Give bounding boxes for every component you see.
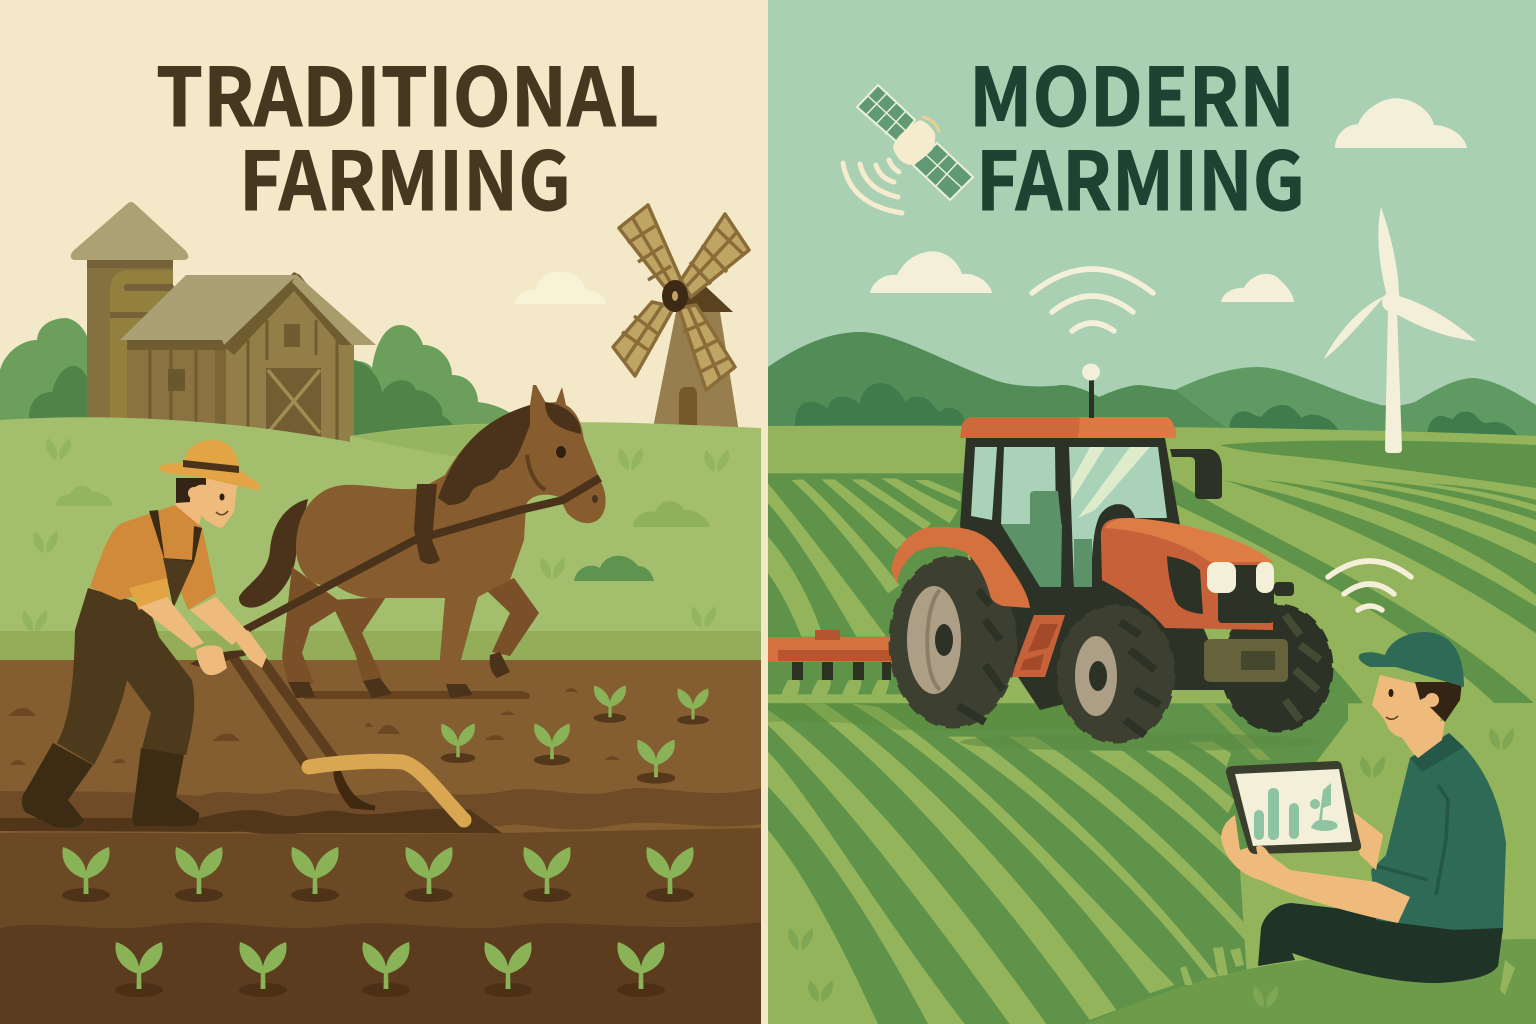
side mirror	[1170, 449, 1222, 499]
horse body	[296, 385, 606, 686]
farmer trousers	[1258, 903, 1503, 983]
foreground grass	[1180, 947, 1515, 995]
farmer shirt	[1371, 733, 1506, 930]
farmer head	[195, 478, 237, 528]
wind turbine	[1324, 207, 1476, 453]
silo	[71, 202, 188, 428]
clouds	[870, 98, 1467, 302]
tablet	[1226, 761, 1361, 854]
tractor body and cab	[960, 438, 1230, 710]
crop rows: upper left	[768, 473, 968, 694]
crop rows: lower field	[768, 703, 1348, 1024]
sky	[768, 0, 1536, 440]
modern farmer	[1221, 632, 1506, 983]
tractor	[768, 364, 1332, 751]
crop rows: upper right	[1170, 480, 1536, 705]
farmer arm	[1221, 815, 1410, 923]
barn	[120, 272, 376, 455]
seedlings	[62, 685, 709, 997]
light meadow right of the rows	[1240, 703, 1536, 1024]
cab roof	[960, 417, 1176, 438]
satellite	[843, 85, 973, 213]
rear fender	[891, 527, 1030, 608]
soil	[0, 660, 761, 1024]
front bumper	[1204, 639, 1288, 682]
heading: traditional farming: FARMING	[239, 118, 571, 234]
horse tail	[239, 499, 308, 608]
panel: modern farming	[768, 0, 1536, 1024]
towed implement	[768, 630, 892, 703]
field	[768, 426, 1536, 1024]
farmer near thumb	[1256, 846, 1278, 868]
satellite signal	[843, 160, 902, 213]
grass tufts	[788, 728, 1514, 1008]
small cloud	[514, 271, 607, 304]
farmer neck and head	[1400, 720, 1445, 758]
wifi signal over tractor	[1032, 269, 1153, 331]
heading: traditional farming: TRADITIONAL	[156, 34, 659, 150]
cab windows	[971, 447, 1167, 587]
heading: modern farming: MODERN	[969, 34, 1295, 150]
heading: modern farming: FARMING	[976, 118, 1305, 234]
farmer shirt	[90, 505, 216, 610]
grass tufts	[22, 438, 729, 632]
tablet chart	[1254, 783, 1337, 840]
horse hooves	[288, 652, 510, 698]
hills	[768, 332, 1536, 445]
far right wheel	[1222, 605, 1332, 731]
front wheel	[1058, 606, 1174, 742]
panel: traditional farming	[0, 34, 761, 1024]
antenna	[1082, 364, 1100, 418]
farmer far hand	[1349, 808, 1383, 870]
farmer cap	[1359, 632, 1464, 687]
plow	[190, 650, 464, 820]
rear wheel	[890, 557, 1016, 727]
farmer with hat	[22, 440, 267, 828]
side step	[1011, 615, 1065, 677]
trees behind barn	[0, 318, 510, 436]
implement shadow band	[768, 703, 1110, 730]
horse	[239, 385, 606, 699]
field: green hills	[0, 417, 761, 661]
farmer trousers	[57, 588, 194, 765]
horse legs	[282, 567, 539, 684]
heading: traditional farming	[158, 65, 657, 212]
tractor shadow	[960, 733, 1320, 751]
dark swoosh on far field	[1220, 440, 1536, 488]
harness and reins	[241, 478, 600, 632]
heading: modern farming	[975, 65, 1301, 212]
farmer hat	[159, 440, 261, 490]
farmer arms	[139, 597, 248, 648]
horse mane	[438, 402, 581, 505]
windmill	[613, 205, 749, 432]
farmer boots	[22, 743, 199, 828]
hood	[1101, 518, 1273, 630]
wifi signal over farmer	[1328, 561, 1411, 610]
farmer hands	[196, 630, 267, 675]
bushes on field	[56, 485, 710, 581]
